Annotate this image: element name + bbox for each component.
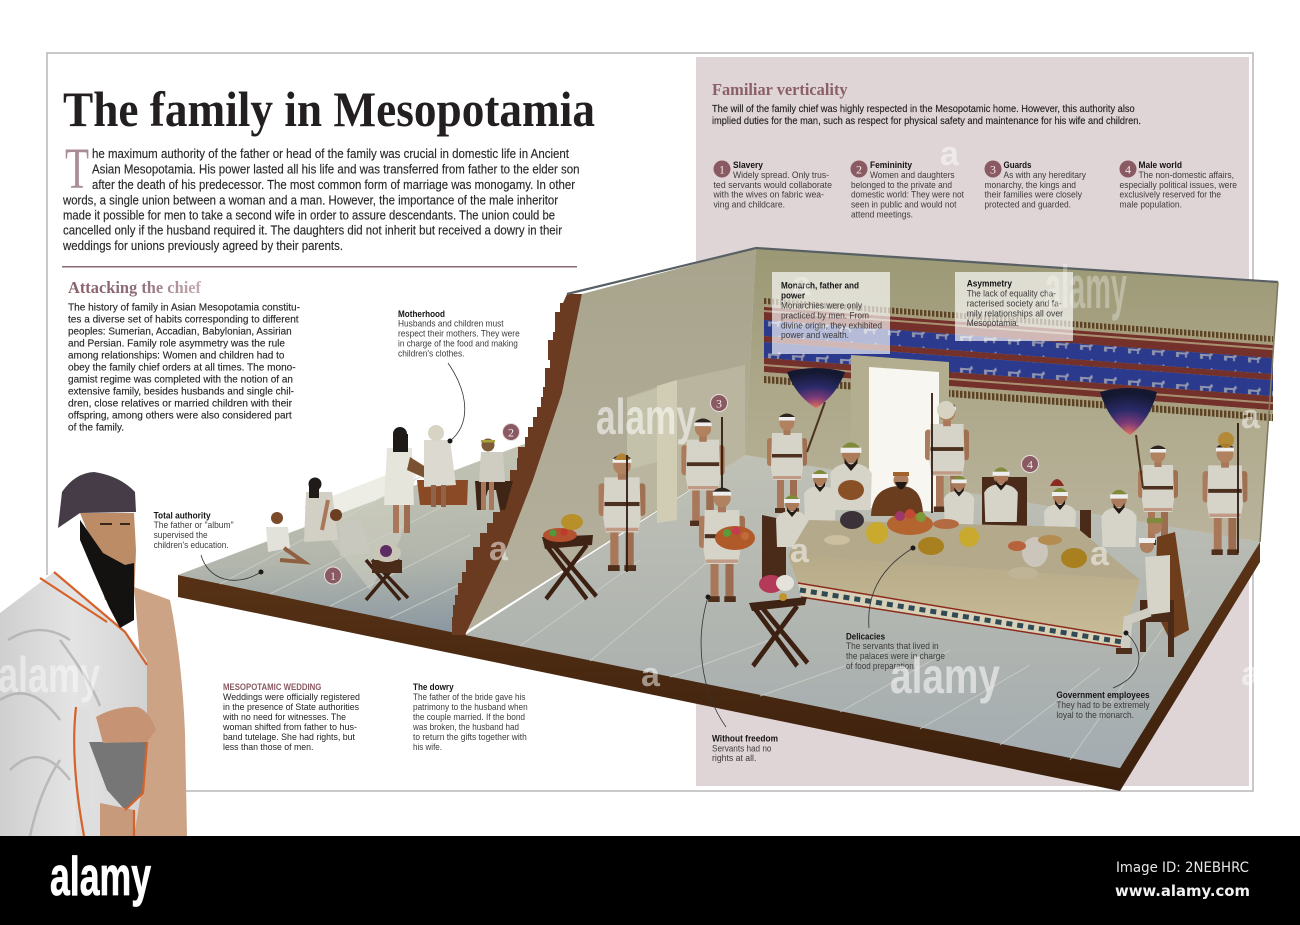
watermarks: a bbox=[489, 530, 509, 568]
server with dish bbox=[830, 442, 872, 510]
callout: asymmetry: racterised society and fa- bbox=[967, 299, 1062, 310]
text: mesopotamic wedding: MESOPOTAMIC WEDDING bbox=[223, 682, 321, 693]
intro text block: Asian Mesopotamia. His power lasted all his life and was transferred from father to the elder son bbox=[92, 162, 580, 176]
callout: total authority: The father or "album" bbox=[154, 520, 234, 531]
mother teaching on floor bbox=[304, 478, 338, 542]
text: the dowry bbox=[412, 682, 528, 753]
guard right bbox=[1203, 423, 1247, 555]
intro text block: weddings for unions previously agreed by their parents. bbox=[62, 239, 343, 253]
bare arm and leg bbox=[100, 587, 187, 836]
diner 5 with chair bbox=[1044, 479, 1091, 540]
body text: peoples: Sumerian, Accadian, Babylonian, Assirian bbox=[68, 326, 292, 338]
item 2 femininity: domestic world: They were not bbox=[851, 190, 964, 201]
callout: monarch, father and power: power and wealth. bbox=[781, 330, 849, 341]
body text: offspring, among others were also considered part bbox=[68, 410, 292, 422]
marker 4 bbox=[1022, 456, 1038, 472]
sleeve bbox=[76, 707, 100, 836]
top edge of walls bbox=[567, 248, 1278, 294]
body text: obey the family chief orders at all times. The mono- bbox=[68, 362, 296, 374]
watermarks: a bbox=[792, 265, 812, 303]
child two bbox=[330, 509, 371, 556]
callout: government employees: loyal to the monarch. bbox=[1056, 710, 1134, 721]
left room floor bbox=[178, 443, 527, 635]
callout: monarch, father and power: power bbox=[781, 291, 805, 302]
fan right bbox=[1100, 388, 1157, 435]
partition wall bbox=[465, 248, 756, 632]
monarch bbox=[871, 472, 923, 516]
watermarks: a bbox=[1241, 398, 1261, 436]
watermarks: a bbox=[940, 135, 960, 173]
child one bbox=[266, 512, 304, 562]
item 3 guards: protected and guarded. bbox=[984, 200, 1071, 211]
introduction bbox=[712, 103, 1141, 127]
panel: attacking the chief bbox=[68, 278, 300, 434]
item 3 guards bbox=[984, 160, 1086, 211]
text: mesopotamic wedding: in the presence of State authorities bbox=[223, 702, 359, 713]
marker 4: 4 bbox=[1027, 458, 1033, 472]
panel text: familiar verticality bbox=[712, 80, 1237, 220]
body text bbox=[68, 302, 300, 434]
callout: delicacies: Delicacies bbox=[846, 631, 885, 642]
callout: without freedom: Servants had no bbox=[712, 744, 771, 754]
body text: tes a diverse set of habits corresponding to different bbox=[68, 314, 299, 326]
white robed diner bbox=[1116, 538, 1170, 654]
item 3 guards: 3 bbox=[990, 162, 996, 176]
item 4 male world: The non-domestic affairs, bbox=[1138, 170, 1234, 181]
item 4 male world: Male world bbox=[1138, 160, 1182, 171]
intro text block: he maximum authority of the father or head of the family was crucial in domestic life in Ancient bbox=[92, 147, 569, 161]
neck bbox=[95, 550, 136, 600]
callout: monarch, father and power: practiced by men. From bbox=[781, 310, 869, 321]
eyes bbox=[100, 523, 130, 525]
body text: of the family. bbox=[68, 422, 124, 434]
callout: motherhood: respect their mothers. They were bbox=[398, 328, 520, 339]
robe folds bbox=[0, 630, 100, 836]
item 2 femininity bbox=[850, 160, 964, 220]
callout: asymmetry: Asymmetry bbox=[967, 279, 1013, 290]
watermarks: alamy bbox=[890, 648, 1000, 704]
callout: total authority: Total authority bbox=[154, 510, 211, 521]
item 1 slavery: 1 bbox=[719, 162, 725, 176]
watermarks: a bbox=[1241, 655, 1261, 693]
leg bbox=[100, 803, 134, 836]
right room floor bbox=[465, 455, 1260, 768]
number markers on scene bbox=[324, 394, 1038, 584]
marker 1: 1 bbox=[330, 569, 336, 583]
footer bar bbox=[0, 836, 1300, 925]
guards and servants behind table bbox=[599, 368, 1247, 572]
leader line bbox=[201, 555, 264, 580]
leader line bbox=[869, 546, 916, 628]
item 1 slavery: Slavery bbox=[733, 160, 764, 171]
drop cap: T bbox=[65, 136, 89, 201]
marker 2: 2 bbox=[508, 426, 514, 440]
fan holder right bbox=[1136, 435, 1178, 545]
text: mesopotamic wedding: woman shifted from father to hus- bbox=[222, 722, 357, 733]
item 1 slavery bbox=[713, 160, 832, 211]
slab edge bbox=[178, 542, 1260, 791]
callout: government employees bbox=[1056, 630, 1150, 721]
body text: extensive family, besides husbands and single chil- bbox=[68, 386, 294, 398]
callout: motherhood: children's clothes. bbox=[398, 348, 464, 359]
item 1 slavery: with the wives on fabric wea- bbox=[713, 190, 824, 201]
callout: without freedom: rights at all. bbox=[712, 753, 756, 764]
small serving table bbox=[749, 575, 808, 666]
item 2 femininity: Women and daughters bbox=[870, 170, 955, 181]
table top bbox=[788, 520, 1140, 580]
diner 4 with chair bbox=[982, 467, 1027, 527]
item 3 guards: As with any hereditary bbox=[1004, 170, 1086, 181]
callout: without freedom: Without freedom bbox=[712, 734, 778, 745]
title: The family in Mesopotamia bbox=[63, 81, 595, 137]
diner 3 bbox=[944, 476, 974, 525]
item 1 slavery: Widely spread. Only trus- bbox=[733, 170, 829, 181]
body text: gamist regime was completed with the notion of an bbox=[68, 374, 293, 386]
text: the dowry: The father of the bride gave his bbox=[413, 692, 526, 703]
callout: asymmetry bbox=[955, 272, 1073, 341]
item 2 femininity: belonged to the private and bbox=[851, 180, 952, 191]
watermarks: a bbox=[1090, 535, 1110, 573]
callout: government employees: They had to be extremely bbox=[1056, 700, 1150, 711]
text: the dowry: to return the gifts together with bbox=[413, 732, 527, 743]
heading: Familiar verticality bbox=[712, 80, 848, 99]
servant with fruit basket bbox=[699, 488, 755, 602]
frieze bbox=[764, 298, 1273, 421]
seated mother with loom bbox=[417, 425, 468, 507]
stepped brick edge bbox=[452, 294, 582, 635]
callout: delicacies: The servants that lived in bbox=[846, 641, 939, 652]
leader line bbox=[701, 594, 726, 727]
figures left room bbox=[266, 425, 513, 600]
callout: monarch, father and power: divine origin, they exhibited bbox=[781, 320, 882, 331]
face bbox=[80, 513, 136, 565]
item 3 guards: Guards bbox=[1004, 160, 1032, 171]
callout: delicacies: of food preparation. bbox=[846, 661, 916, 672]
front right diners bbox=[1116, 518, 1189, 657]
callout: monarch, father and power bbox=[772, 272, 890, 354]
callout: motherhood: Motherhood bbox=[398, 309, 445, 320]
seated daughter bbox=[475, 438, 513, 510]
panel: familiar verticality background bbox=[696, 57, 1249, 786]
item 1 slavery: ving and childcare. bbox=[714, 200, 785, 211]
callout: monarch, father and power: Monarch, father and bbox=[781, 281, 859, 292]
left diner bbox=[776, 495, 808, 547]
watermarks: a bbox=[790, 532, 810, 570]
banquet table bbox=[788, 509, 1140, 647]
side doorway bbox=[627, 365, 745, 523]
callout: government employees: Government employees bbox=[1056, 690, 1150, 701]
text: mesopotamic wedding: Weddings were officially registered bbox=[223, 692, 360, 703]
callout: total authority: supervised the bbox=[154, 530, 208, 541]
text: mesopotamic wedding bbox=[222, 682, 360, 753]
left diner chair bbox=[762, 515, 786, 578]
item 4 male world: especially political issues, were bbox=[1120, 180, 1237, 191]
watermarks: alamy bbox=[596, 389, 696, 445]
page frame bbox=[47, 53, 1253, 791]
diorama: palace cross-section bbox=[178, 248, 1278, 791]
item 2 femininity: attend meetings. bbox=[851, 210, 913, 220]
seated diners and servers bbox=[762, 442, 1137, 578]
fan left bbox=[787, 368, 845, 408]
item 4 male world bbox=[1120, 160, 1237, 211]
watermarks: a bbox=[641, 656, 661, 694]
hand bbox=[96, 707, 156, 743]
callout: asymmetry: The lack of equality cha- bbox=[967, 289, 1056, 300]
callout: delicacies bbox=[846, 546, 945, 672]
item 2 femininity: 2 bbox=[856, 162, 862, 176]
body text: and Persian. Family role asymmetry was the rule bbox=[68, 338, 285, 350]
leader line bbox=[448, 363, 465, 444]
chair bbox=[1140, 600, 1174, 657]
robe bbox=[0, 572, 147, 836]
doorway bbox=[851, 355, 949, 512]
text: the dowry: the couple married. If the bond bbox=[413, 712, 525, 723]
callout: without freedom bbox=[701, 594, 778, 764]
watermarks: alamy bbox=[0, 647, 100, 703]
callout: motherhood: Husbands and children must bbox=[398, 319, 504, 330]
fan holder left bbox=[767, 402, 825, 513]
site url: www.alamy.com bbox=[1115, 882, 1250, 900]
food bbox=[824, 509, 1087, 579]
text: mesopotamic wedding: band tutelage. She had rights, but bbox=[223, 732, 355, 743]
text: the dowry: his wife. bbox=[413, 742, 442, 753]
callout: asymmetry: mily relationships all over bbox=[967, 308, 1063, 319]
patterned border bbox=[798, 583, 1123, 647]
intro text block: made it possible for men to take a second wife in order to assure descendants. The union could be bbox=[63, 208, 555, 222]
marker 3: 3 bbox=[716, 396, 722, 410]
marker 3 bbox=[710, 394, 728, 412]
body text: The history of family in Asian Mesopotamia constitu- bbox=[68, 302, 300, 314]
text: the dowry: The dowry bbox=[413, 682, 454, 693]
intro text block: words, a single union between a woman and a man. However, the importance of the male inheritor bbox=[62, 193, 558, 207]
intro text block: after the death of his predecessor. The most common form of marriage was monogamy. In other bbox=[92, 178, 575, 192]
watermarks bbox=[0, 135, 1261, 704]
turban bbox=[58, 472, 136, 528]
standing woman bbox=[384, 427, 443, 533]
marker 1 bbox=[324, 567, 342, 584]
item 4 male world: exclusively reserved for the bbox=[1120, 190, 1221, 201]
callout: delicacies: the palaces were in charge bbox=[846, 651, 945, 662]
beard bbox=[80, 520, 134, 628]
marker 2 bbox=[502, 424, 520, 440]
body text: among relationships: Women and children had to bbox=[68, 350, 285, 362]
item 2 femininity: seen in public and would not bbox=[851, 200, 957, 211]
alamy logo: alamy bbox=[50, 845, 151, 907]
heading: Attacking the chief bbox=[68, 278, 201, 297]
drape shadow bbox=[89, 742, 147, 810]
callout: total authority bbox=[154, 510, 264, 580]
image id: Image ID: 2NEBHRC bbox=[1116, 860, 1249, 876]
item 4 male world: 4 bbox=[1125, 162, 1131, 176]
callout: motherhood bbox=[398, 309, 520, 444]
item 1 slavery: ted servants would collaborate bbox=[714, 180, 832, 191]
callout: total authority: children's education. bbox=[154, 540, 229, 551]
text: the dowry: patrimony to the husband when bbox=[413, 702, 528, 713]
leader line bbox=[1113, 630, 1139, 688]
callout: motherhood: in charge of the food and making bbox=[398, 338, 518, 349]
intro text block bbox=[62, 136, 580, 253]
kneeling server bbox=[804, 470, 836, 522]
back wall side edge bbox=[1260, 282, 1278, 542]
item 3 guards: monarchy, the kings and bbox=[984, 180, 1076, 191]
stool with basket bbox=[366, 544, 408, 600]
guard by partition bbox=[599, 454, 645, 572]
side table with fruit bbox=[542, 514, 596, 599]
watermarks: alamy bbox=[1045, 254, 1127, 321]
cloth front bbox=[788, 555, 1140, 640]
body text: dren, close relatives or married children with their bbox=[68, 398, 292, 410]
brown robed diner bbox=[1147, 518, 1189, 640]
diner 6 bbox=[1101, 490, 1137, 547]
item 3 guards: their families were closely bbox=[984, 190, 1082, 201]
introduction: implied duties for the man, such as respect for physical safety and maintenance for his wife and children. bbox=[712, 115, 1141, 127]
item 2 femininity: Femininity bbox=[870, 160, 913, 171]
helmet guard bbox=[925, 393, 969, 513]
intro text block: cancelled only if the husband required it. The daughters did not inherit but received a dowry in their bbox=[63, 224, 562, 238]
callout: monarch, father and power: Monarchies were only bbox=[781, 301, 862, 312]
guard with spear bbox=[681, 417, 725, 526]
text: mesopotamic wedding: less than those of men. bbox=[223, 742, 313, 753]
orange trim bbox=[40, 572, 147, 836]
introduction: The will of the family chief was highly respected in the Mesopotamic home. However, this authority also bbox=[712, 103, 1135, 115]
item 4 male world: male population. bbox=[1120, 200, 1182, 211]
text: mesopotamic wedding: with no need for witnesses. The bbox=[222, 712, 346, 723]
back wall bbox=[745, 248, 1278, 542]
callout: asymmetry: Mesopotamia. bbox=[967, 318, 1019, 329]
text: the dowry: was broken, the husband had bbox=[412, 722, 519, 733]
illustration: mesopotamian man bbox=[0, 472, 187, 836]
